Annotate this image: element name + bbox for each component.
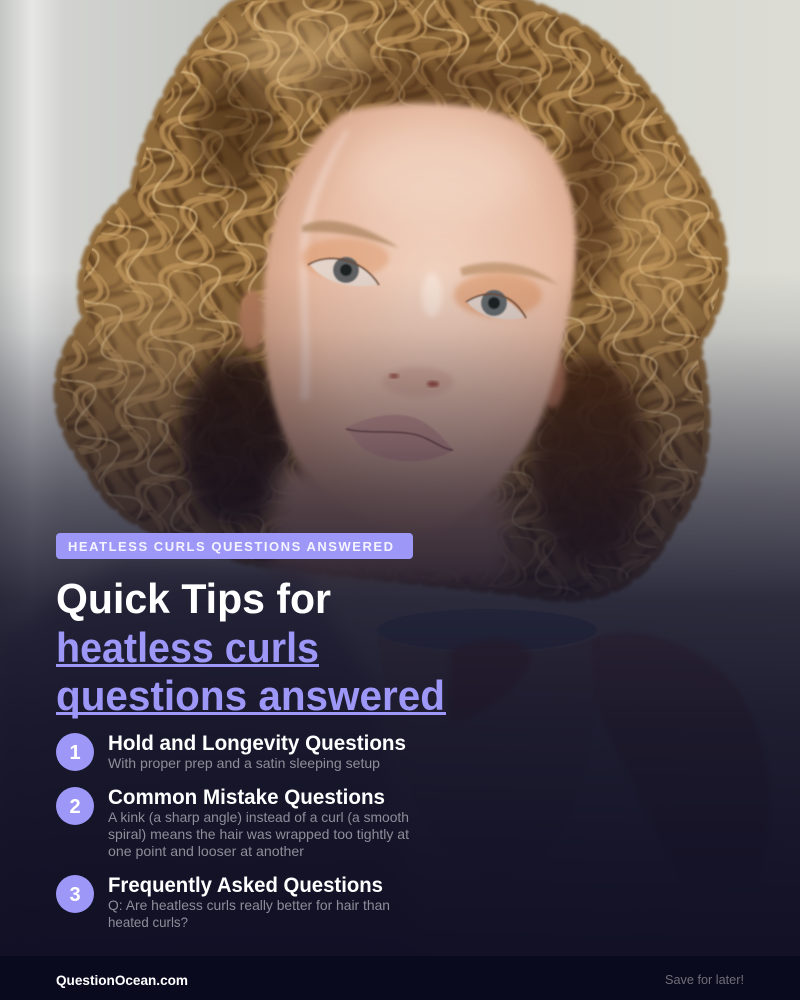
- forehead light: [350, 130, 530, 220]
- title: heatless curls: [56, 624, 319, 671]
- tip 2: spiral) means the hair was wrapped too tightly at: [108, 826, 409, 842]
- rainbow light streak: [300, 130, 350, 400]
- hair mass: [40, 0, 740, 610]
- number badge 1: [56, 733, 94, 771]
- number badge 2: [56, 787, 94, 825]
- footer bar: Save for later!: [665, 972, 744, 987]
- ear right: [539, 348, 565, 408]
- nose: [382, 273, 454, 397]
- title: Quick Tips for: [56, 575, 331, 622]
- tip 3: heated curls?: [108, 914, 188, 930]
- tag pill: HEATLESS CURLS QUESTIONS ANSWERED: [68, 539, 393, 554]
- hair shadow areas: [195, 70, 275, 190]
- tip 3: [56, 874, 390, 930]
- number badge 3: [56, 875, 94, 913]
- mug body: [378, 635, 600, 880]
- tip 1: With proper prep and a satin sleeping setup: [108, 755, 380, 771]
- tip 2: A kink (a sharp angle) instead of a curl (a smooth: [108, 809, 409, 825]
- number badge 1: 1: [69, 742, 81, 764]
- neck: [270, 470, 510, 580]
- tip 2: Common Mistake Questions: [108, 786, 385, 809]
- eye shadow: [301, 238, 389, 278]
- footer bar: QuestionOcean.com: [56, 972, 188, 988]
- tag pill: [56, 533, 413, 559]
- ear left: [239, 290, 265, 350]
- hand: [590, 632, 770, 880]
- eye right: [466, 290, 526, 319]
- number badge 2: 2: [69, 796, 81, 818]
- tip 1: Hold and Longevity Questions: [108, 732, 406, 755]
- tip 3: Frequently Asked Questions: [108, 874, 383, 897]
- eye left: [308, 257, 379, 286]
- tip 3: Q: Are heatless curls really better for hair than: [108, 897, 390, 913]
- tip 2: one point and looser at another: [108, 843, 304, 859]
- hair light areas: [230, 20, 370, 90]
- tip 1: [56, 732, 406, 771]
- number badge 3: 3: [69, 884, 81, 906]
- title: questions answered: [56, 672, 445, 719]
- footer bar: [0, 956, 800, 1000]
- lips: [346, 415, 453, 462]
- tip 2: [56, 786, 409, 859]
- sweater: [0, 560, 420, 1000]
- brow left: [302, 221, 399, 248]
- face: [263, 104, 576, 531]
- mug rim: [377, 609, 597, 651]
- brow right: [460, 262, 558, 285]
- title: [56, 575, 446, 719]
